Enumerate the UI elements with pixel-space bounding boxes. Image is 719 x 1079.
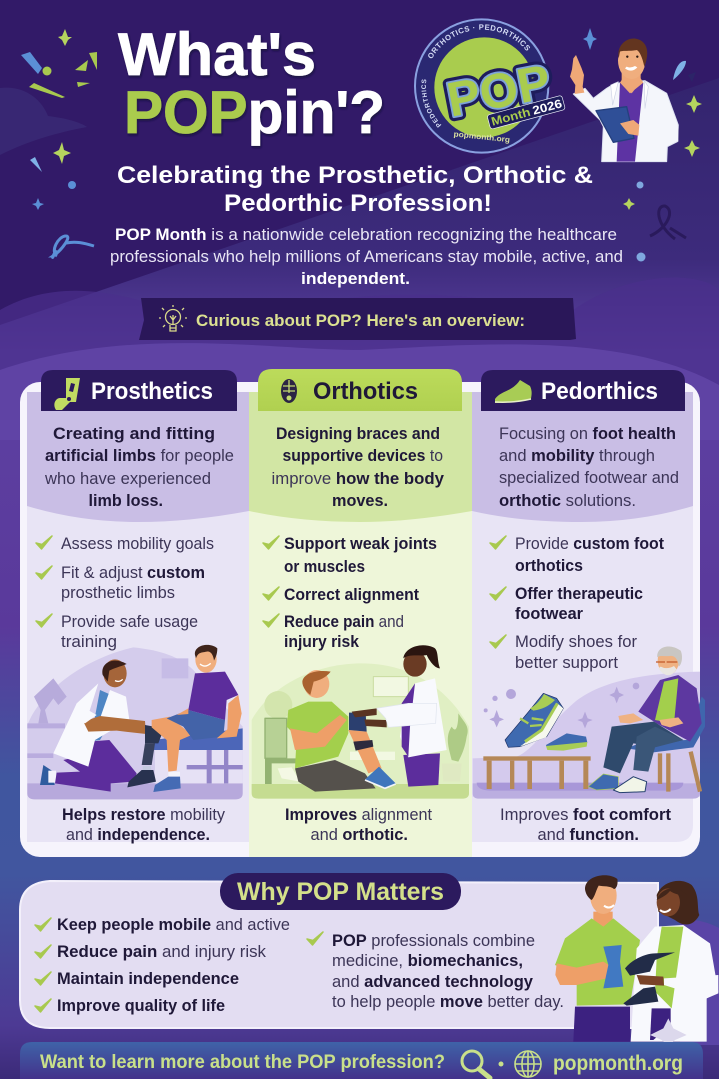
call to action bar: Want to learn more about the POP profession? xyxy=(40,1052,445,1073)
man xyxy=(555,875,640,1042)
list: prosthetics tasks: prosthetic limbs xyxy=(61,583,175,602)
description: pedorthics: specialized footwear and xyxy=(499,468,679,487)
description: prosthetics: artificial limbs for people xyxy=(45,446,234,465)
heading: why POP matters xyxy=(220,873,461,910)
header: pedorthics xyxy=(481,370,685,411)
intro paragraph xyxy=(110,225,623,288)
list: pedorthics tasks xyxy=(490,534,664,672)
description: orthotics: improve how the body xyxy=(272,469,445,488)
logo badge: POP Month 2026: popmonth.org xyxy=(453,129,511,144)
list: benefits: Keep people mobile and active xyxy=(57,915,290,934)
logo badge: POP Month 2026: POP xyxy=(443,55,555,128)
list: benefits: Reduce pain and injury risk xyxy=(57,942,266,961)
subtitle: Pedorthic Profession! xyxy=(224,190,492,217)
panel: why POP matters xyxy=(20,873,718,1047)
list: pedorthics tasks: Offer therapeutic xyxy=(515,584,643,603)
seated patient xyxy=(588,646,702,793)
text: POP professionals statement xyxy=(307,931,564,1011)
call to action bar: popmonth.org xyxy=(553,1052,683,1075)
illustration: clinician fitting knee brace xyxy=(252,645,469,799)
list: pedorthics tasks: footwear xyxy=(515,604,583,623)
title: What's xyxy=(118,21,316,88)
list: pedorthics tasks: Modify shoes for xyxy=(515,632,637,651)
column: prosthetics xyxy=(27,370,243,844)
description: orthotics: moves. xyxy=(332,491,388,510)
header: prosthetics: Prosthetics xyxy=(91,378,213,405)
list: benefits xyxy=(35,915,290,1015)
list: orthotics tasks xyxy=(263,534,437,651)
logo badge: POP Month 2026: ORTHOTICS · PEDORTHICS xyxy=(428,24,530,58)
text: POP professionals statement: POP professionals combine xyxy=(332,931,535,950)
header: orthotics xyxy=(258,369,462,411)
list: orthotics tasks: injury risk xyxy=(284,632,359,651)
logo badge: POP Month 2026 xyxy=(414,18,566,154)
list: pedorthics tasks: better support xyxy=(515,653,618,672)
outcome: pedorthics xyxy=(500,805,671,844)
icon: globe xyxy=(515,1051,541,1077)
list: benefits: Improve quality of life xyxy=(57,996,225,1015)
decoration: confetti and sparkles xyxy=(21,28,702,262)
outcome: prosthetics: Helps restore mobility xyxy=(62,805,225,824)
logo badge: POP Month 2026: Month xyxy=(490,105,532,129)
header: prosthetics xyxy=(41,370,237,411)
description: pedorthics: and mobility through xyxy=(499,446,655,465)
list: pedorthics tasks: Provide custom foot xyxy=(515,534,664,553)
outcome: prosthetics: and independence. xyxy=(66,825,210,844)
wooden bench xyxy=(483,756,591,789)
subtitle xyxy=(117,162,593,217)
icon: light bulb xyxy=(159,305,187,331)
banner: overview ribbon xyxy=(139,298,576,340)
description: orthotics xyxy=(272,424,445,510)
list: pedorthics tasks: orthotics xyxy=(515,556,583,575)
outcome: pedorthics: Improves foot comfort xyxy=(500,805,671,824)
illustration: patient with therapeutic shoes xyxy=(473,646,705,799)
outcome: orthotics xyxy=(285,805,432,844)
outcome: prosthetics xyxy=(62,805,225,844)
chair xyxy=(627,697,705,792)
text: POP professionals statement: medicine, biomechanics, xyxy=(332,951,523,970)
heading: why POP matters: Why POP Matters xyxy=(237,878,444,906)
outcome: orthotics: and orthotic. xyxy=(310,825,408,844)
list: orthotics tasks: or muscles xyxy=(284,557,365,576)
illustration: doctor pointing xyxy=(570,39,678,162)
description: prosthetics xyxy=(44,424,234,510)
description: orthotics: supportive devices to xyxy=(282,446,443,465)
icon: magnifier xyxy=(462,1051,490,1078)
logo badge: POP Month 2026: 2026 xyxy=(531,96,564,118)
list: prosthetics tasks: Fit & adjust custom xyxy=(61,563,205,582)
header: pedorthics: Pedorthics xyxy=(541,378,658,405)
outcome: pedorthics: and function. xyxy=(538,825,639,844)
column: orthotics xyxy=(252,369,469,844)
description: orthotics: Designing braces and xyxy=(276,424,440,443)
illustration: clinician fitting prosthetic leg xyxy=(27,645,243,799)
column: pedorthics xyxy=(473,370,705,844)
big running shoe xyxy=(505,693,563,747)
list: orthotics tasks: Support weak joints xyxy=(284,534,437,553)
text: POP professionals statement: to help people move better day. xyxy=(332,992,564,1011)
intro paragraph: POP Month is a nationwide celebration recognizing the healthcare xyxy=(115,225,617,244)
list: prosthetics tasks xyxy=(36,534,214,651)
text: POP professionals statement: and advanced technology xyxy=(332,972,534,991)
list: prosthetics tasks: training xyxy=(61,632,117,651)
logo badge: POP Month 2026: PEDORTHICS xyxy=(421,79,442,128)
woman hair back xyxy=(657,881,699,925)
intro paragraph: independent. xyxy=(301,269,410,288)
list: benefits: Maintain independence xyxy=(57,969,239,988)
outcome: orthotics: Improves alignment xyxy=(285,805,432,824)
subtitle: Celebrating the Prosthetic, Orthotic & xyxy=(117,162,593,189)
list: prosthetics tasks: Provide safe usage xyxy=(61,612,198,631)
list: orthotics tasks: Correct alignment xyxy=(284,585,419,604)
description: prosthetics: who have experienced xyxy=(44,469,211,488)
description: pedorthics: orthotic solutions. xyxy=(499,491,636,510)
description: prosthetics: Creating and fitting xyxy=(53,424,215,443)
intro paragraph: professionals who help millions of Americans stay mobile, active, and xyxy=(110,247,623,266)
woman xyxy=(623,888,718,1047)
description: pedorthics: Focusing on foot health xyxy=(499,424,676,443)
call to action bar xyxy=(20,1042,703,1079)
illustration: two POP professionals xyxy=(555,875,718,1047)
list: orthotics tasks: Reduce pain and xyxy=(284,612,404,631)
panel: three discipline card xyxy=(20,382,700,857)
logo badge: POP Month 2026: POP xyxy=(443,55,555,128)
banner: overview ribbon: Curious about POP? Here's an overview: xyxy=(196,311,525,330)
small shoe xyxy=(546,733,587,751)
title xyxy=(118,21,385,146)
title: POPpin'? xyxy=(124,79,385,146)
header: orthotics: Orthotics xyxy=(313,378,418,405)
description: pedorthics xyxy=(499,424,679,510)
list: prosthetics tasks: Assess mobility goals xyxy=(61,534,214,553)
description: prosthetics: limb loss. xyxy=(88,491,163,510)
